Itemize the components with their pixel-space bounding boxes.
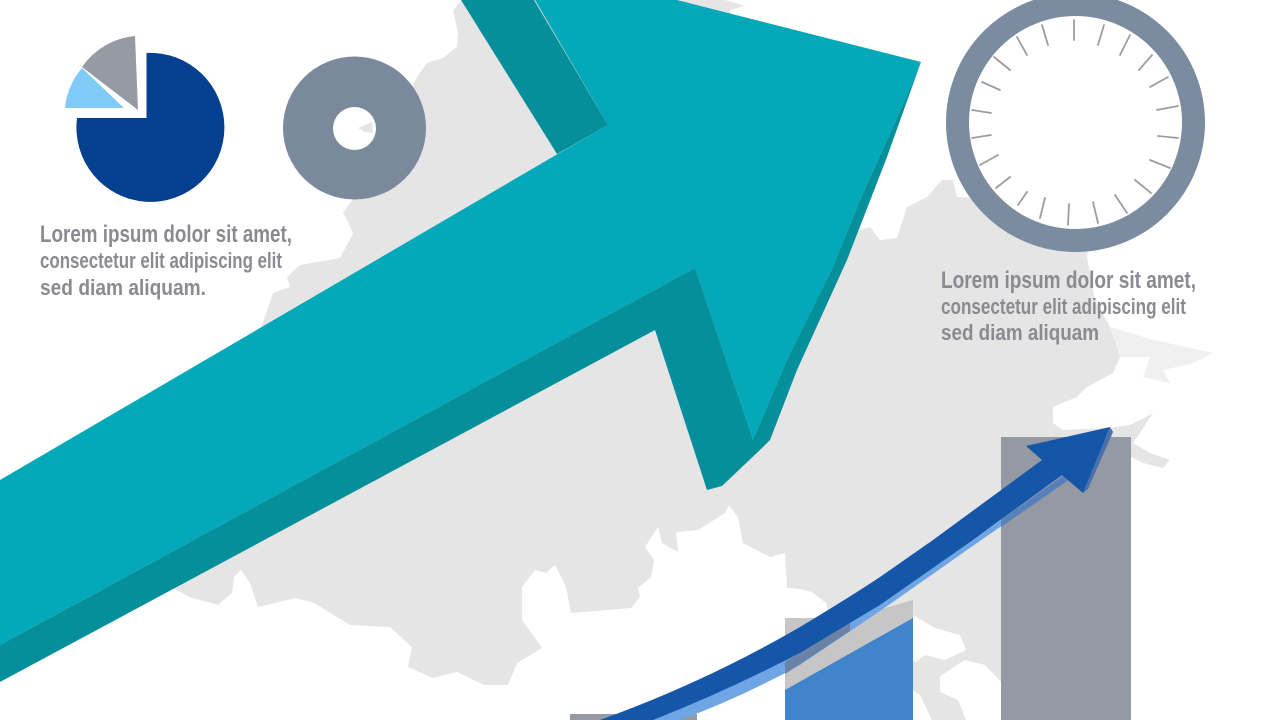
clock ring (958, 4, 1194, 240)
left text block: sed diam aliquam. (40, 275, 206, 300)
arrow shadow (653, 475, 1070, 720)
clock ticks (972, 20, 1178, 225)
arrow dark fold at head (461, 0, 608, 154)
blue growth arrow (600, 427, 1113, 720)
large teal arrow (0, 0, 921, 682)
pie light blue slice (65, 68, 124, 108)
pie chart (65, 36, 224, 202)
right text block: sed diam aliquam (941, 320, 1099, 345)
pie main slice (76, 53, 224, 202)
bar 2 (785, 600, 913, 720)
arrow dark underside (0, 62, 921, 682)
pie grey slice (82, 36, 138, 110)
left text block (40, 221, 292, 300)
right text block: Lorem ipsum dolor sit amet, (941, 267, 1196, 294)
arrow shaft and head (0, 0, 921, 645)
clock dial (958, 4, 1194, 240)
bar 1 (570, 714, 697, 720)
donut chart (283, 56, 426, 200)
bar chart (570, 437, 1131, 720)
left text block: Lorem ipsum dolor sit amet, (40, 221, 292, 248)
right text block: consectetur elit adipiscing elit (941, 294, 1187, 319)
right text block (941, 267, 1196, 345)
arrow body (600, 427, 1110, 720)
bar 3 (1001, 437, 1131, 720)
arrow shadow over bars (1001, 475, 1070, 527)
left text block: consectetur elit adipiscing elit (40, 248, 283, 273)
